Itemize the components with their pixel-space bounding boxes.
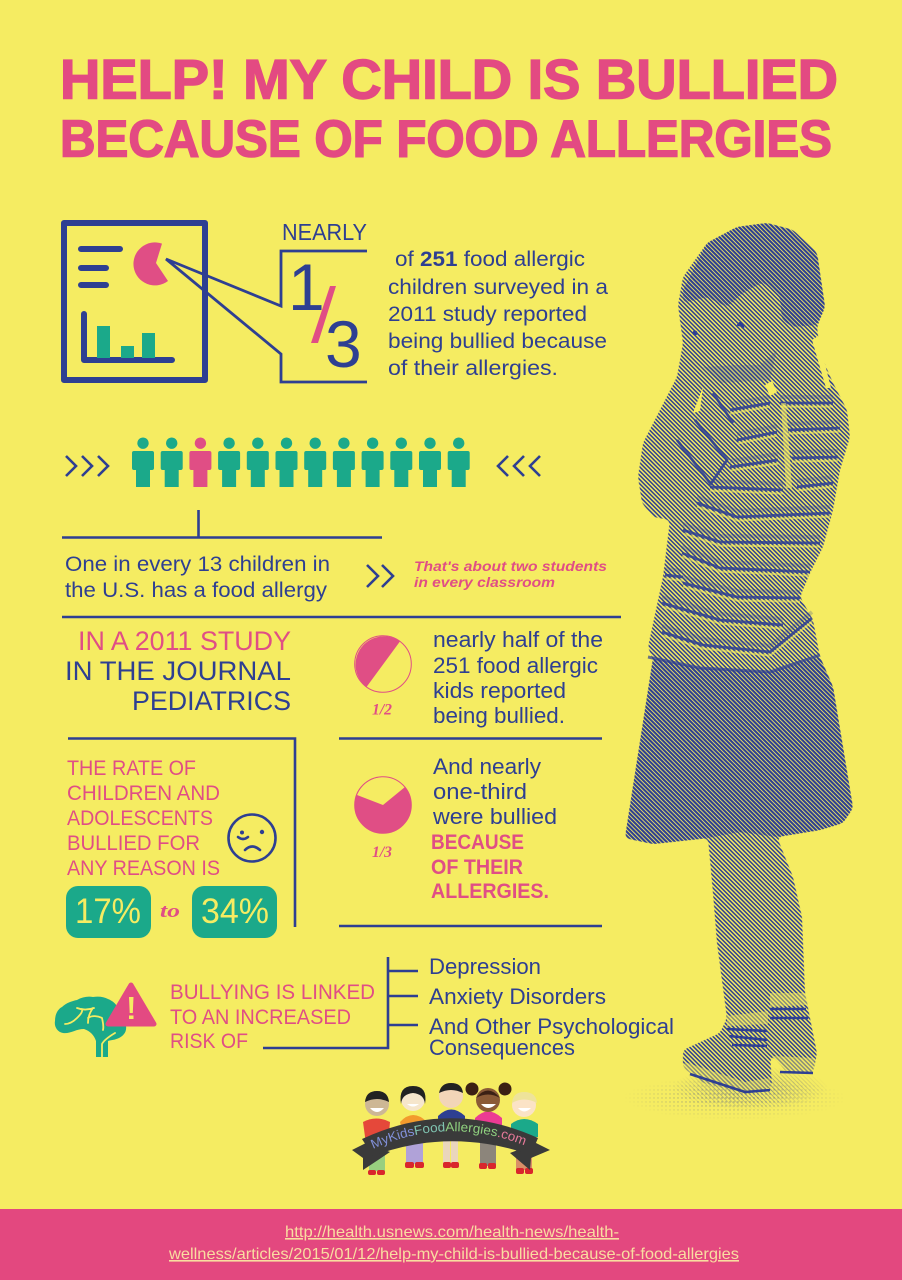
logo: kid 2	[400, 1086, 427, 1168]
title: BECAUSE OF FOOD ALLERGIES	[60, 110, 832, 168]
text: one third bullied: were bullied	[432, 804, 557, 829]
text: one third bullied: And nearly	[433, 754, 541, 779]
logo: banner	[352, 1118, 550, 1170]
heading: 2011 study	[65, 626, 291, 716]
badge: 34 percent	[192, 886, 277, 938]
divider	[339, 925, 602, 927]
logo: kid 5	[511, 1092, 538, 1174]
text: nearly half: 251 food allergic	[433, 653, 598, 678]
text: linked to increased risk: BULLYING IS LINKED	[170, 980, 375, 1004]
girl: shirt stripes	[648, 323, 840, 672]
girl: light gaps	[683, 336, 831, 1093]
text: linked to increased risk	[170, 980, 375, 1053]
title	[60, 48, 838, 168]
logo: kid 4	[466, 1082, 512, 1169]
text: rate of bullying	[67, 756, 220, 880]
logo: kid 3	[438, 1083, 465, 1168]
text: survey statistic: being bullied because	[388, 330, 607, 353]
list: psychological consequences: And Other Psychological	[429, 1014, 674, 1039]
callout: nearly one third: NEARLY	[282, 219, 367, 245]
list: psychological consequences: Depression	[429, 954, 541, 979]
logo: kid 1	[363, 1091, 390, 1175]
text: one third bullied: one-third	[433, 779, 527, 804]
icon row: one in thirteen children	[132, 438, 470, 487]
text: survey statistic: of their allergies.	[388, 357, 558, 380]
text: one third bullied: ALLERGIES.	[431, 879, 549, 903]
logo: My Kids Food Allergies	[352, 1082, 550, 1175]
text: survey statistic: 2011 study reported	[388, 303, 587, 326]
badge: 17 percent	[66, 886, 151, 938]
arrows: chevrons pointing left	[498, 456, 540, 476]
chart: one third pie	[355, 777, 411, 861]
text: one third bullied: BECAUSE	[431, 830, 524, 854]
illustration: halftone girl covering her ears	[626, 223, 853, 1118]
chart: one third pie: 1/3	[372, 844, 392, 861]
text: to: to	[160, 901, 180, 922]
text: rate of bullying: BULLIED FOR	[67, 831, 200, 855]
connector lines	[263, 957, 418, 1048]
list: psychological consequences	[429, 954, 674, 1060]
badge: 17 percent: 17%	[75, 892, 141, 931]
divider	[339, 737, 602, 740]
icon: report with pie and bar chart	[64, 223, 205, 380]
heading: 2011 study: IN A 2011 STUDY	[78, 626, 291, 656]
text: survey statistic	[388, 248, 608, 380]
text: rate of bullying: ANY REASON IS	[67, 856, 220, 880]
text: nearly half	[433, 627, 603, 728]
bracket line	[62, 510, 382, 538]
arrows: double chevron	[367, 565, 393, 587]
text: rate of bullying: THE RATE OF	[67, 756, 196, 780]
girl: socks and shoe soles	[690, 1009, 813, 1092]
text: one in 13 children: One in every 13 children in	[65, 553, 330, 576]
heading: 2011 study: PEDIATRICS	[132, 686, 291, 716]
arrows: chevrons pointing right	[66, 456, 108, 476]
text: nearly half: being bullied.	[433, 703, 565, 728]
title: HELP! MY CHILD IS BULLIED	[60, 48, 838, 110]
callout: two students in every classroom	[414, 558, 607, 590]
footer: source link: wellness/articles/2015/01/12/help-my-child-is-bullied-because-of-food-allergies	[168, 1246, 739, 1263]
list: psychological consequences: Consequences	[429, 1035, 575, 1060]
text: rate of bullying: ADOLESCENTS	[67, 806, 213, 830]
text: nearly half: nearly half of the	[433, 627, 603, 652]
heading: 2011 study: IN THE JOURNAL	[65, 656, 291, 686]
callout: nearly one third: 1	[288, 250, 325, 324]
text: one in 13 children	[65, 553, 330, 602]
footer: source link: http://health.usnews.com/health-news/health-	[285, 1224, 619, 1241]
icon: brain with warning triangle	[55, 985, 154, 1057]
text: linked to increased risk: TO AN INCREASED	[170, 1005, 351, 1029]
logo: banner: MyKidsFoodAllergies.com	[370, 1122, 526, 1148]
text: survey statistic: children surveyed in a	[388, 276, 608, 299]
text: survey statistic: of 251 food allergic	[395, 248, 585, 271]
bracket line	[68, 738, 295, 927]
text: linked to increased risk: RISK OF	[170, 1029, 248, 1053]
text: rate of bullying: CHILDREN AND	[67, 781, 220, 805]
girl: skirt	[626, 658, 853, 844]
callout: nearly one third: 3	[325, 307, 362, 381]
chart: one half pie: 1/2	[372, 702, 392, 718]
text: one third bullied: OF THEIR	[431, 855, 523, 879]
callout: two students in every classroom: in every classroom	[414, 574, 555, 590]
text: one in 13 children: the U.S. has a food allergy	[65, 579, 328, 602]
divider	[62, 616, 621, 618]
text: nearly half: kids reported	[433, 678, 566, 703]
list: psychological consequences: Anxiety Disorders	[429, 984, 606, 1009]
text: one third bullied	[431, 754, 557, 903]
callout: two students in every classroom: That's about two students	[414, 558, 607, 574]
footer bar	[0, 1209, 902, 1280]
icon: sad face	[228, 814, 276, 862]
footer: source link	[168, 1224, 739, 1263]
callout: nearly one third	[166, 219, 367, 382]
badge: 34 percent: 34%	[201, 892, 269, 931]
girl: hair	[682, 223, 825, 327]
girl: neck and face shadow	[703, 350, 777, 383]
chart: one half pie	[355, 636, 411, 718]
